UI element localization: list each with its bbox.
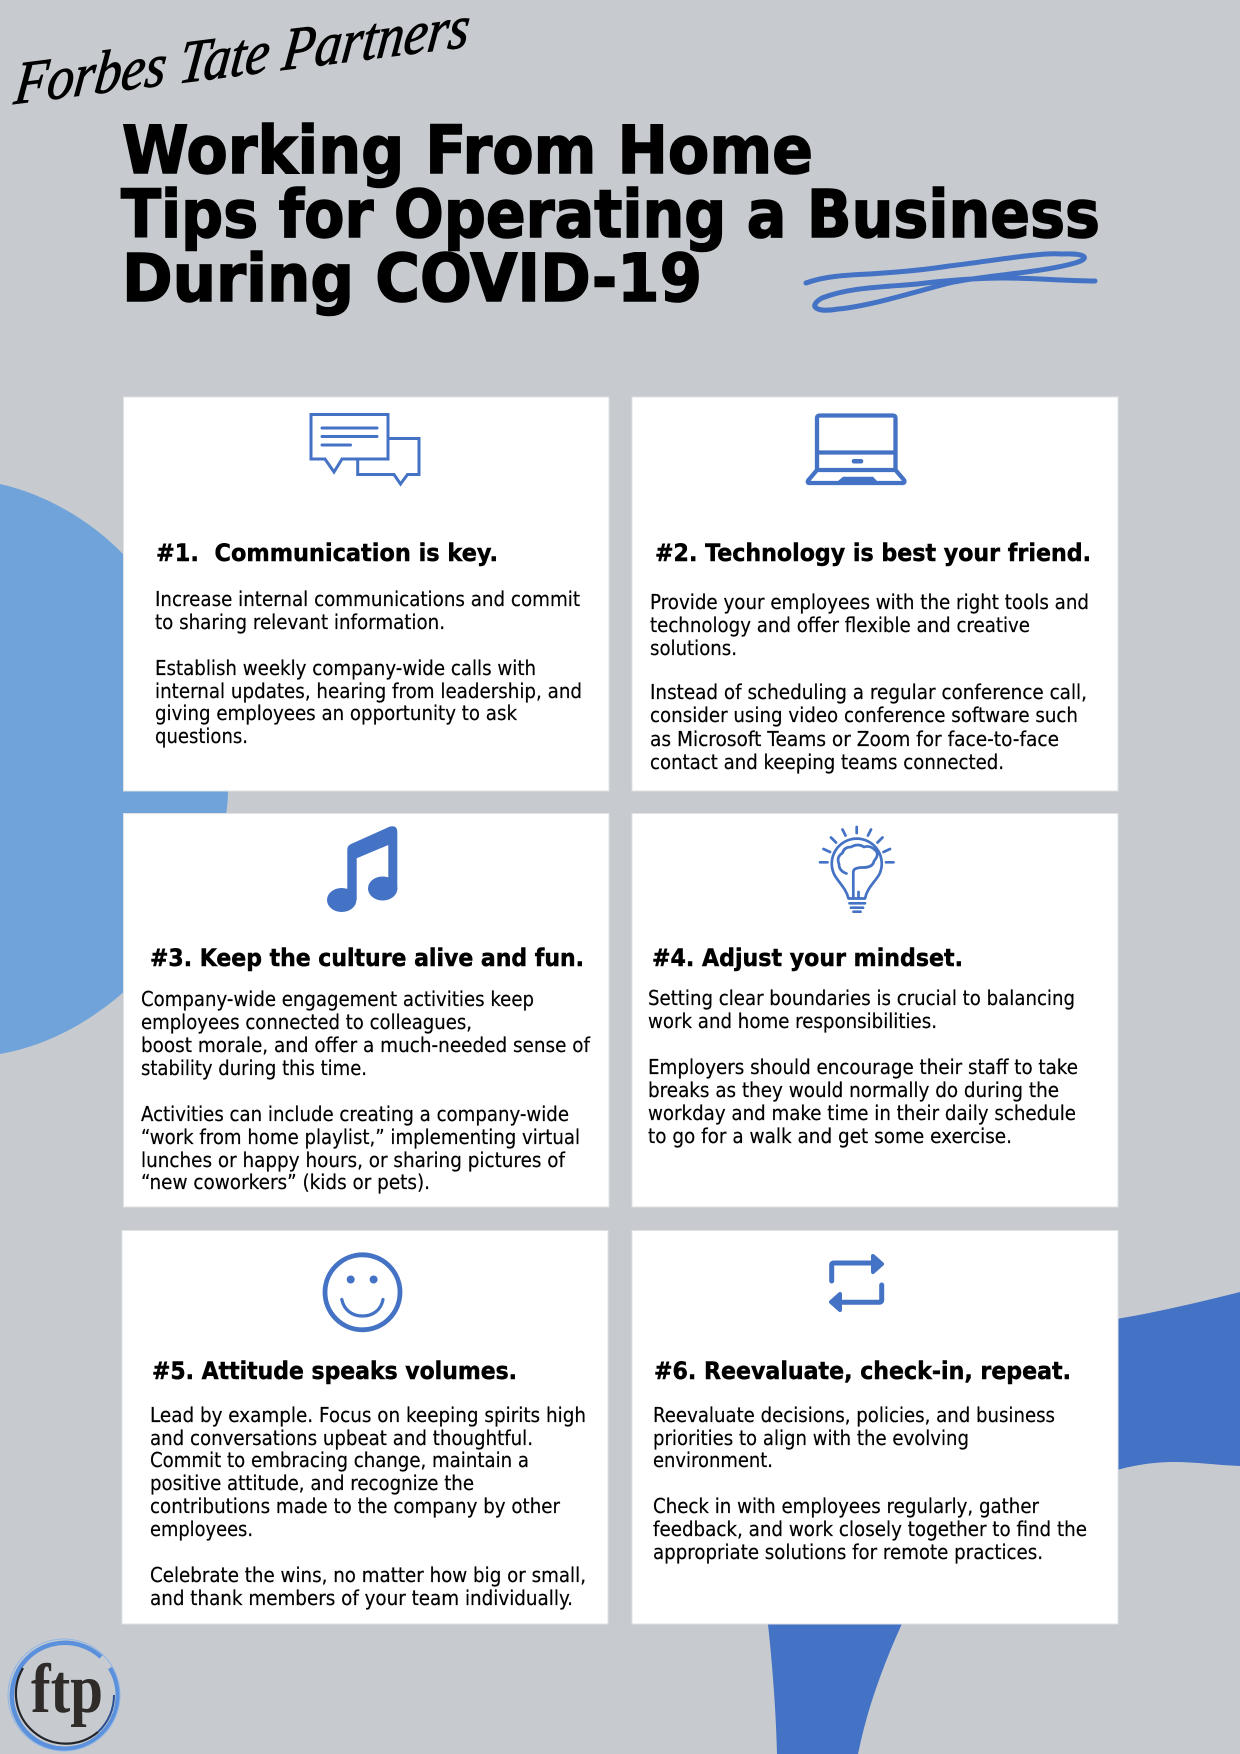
body text: tip 3: “work from home playlist,” implementing virtual <box>141 1125 580 1149</box>
panel: tip 2 technology <box>632 397 1118 791</box>
icon: laptop <box>808 416 904 483</box>
body text: tip 4: to go for a walk and get some exercise. <box>648 1124 1012 1148</box>
body text: tip 4: work and home responsibilities. <box>648 1009 937 1033</box>
body text: tip 5: Commit to embracing change, maintain a <box>150 1448 529 1472</box>
body text: tip 3: stability during this time. <box>141 1056 367 1080</box>
body text: tip 5: positive attitude, and recognize the <box>150 1471 474 1495</box>
body text: tip 2: consider using video conference software such <box>650 703 1078 727</box>
panel: tip 5 attitude <box>122 1230 608 1624</box>
panel: tip 1 communication <box>124 397 609 791</box>
body text: tip 6: feedback, and work closely together to find the <box>653 1517 1087 1541</box>
body text: tip 1: Increase internal communications and commit <box>155 587 580 611</box>
body text: tip 4: workday and make time in their daily schedule <box>648 1101 1076 1125</box>
body text: tip 4: breaks as they would normally do during the <box>648 1078 1059 1102</box>
body text: tip 2: solutions. <box>650 636 737 660</box>
icon: smiley face <box>325 1255 400 1330</box>
body text: tip 3: boost morale, and offer a much-needed sense of <box>141 1033 591 1057</box>
body text: tip 5: employees. <box>150 1517 253 1541</box>
body text: tip 5: contributions made to the company by other <box>150 1494 561 1518</box>
heading: tip 6: #6. Reevaluate, check-in, repeat. <box>654 1357 1071 1385</box>
body text: tip 6: Check in with employees regularly, gather <box>653 1494 1040 1518</box>
background blob: light blue left <box>0 484 228 1054</box>
body text: tip 5: Lead by example. Focus on keeping spirits high <box>150 1403 586 1427</box>
background blob: blue right <box>1110 1292 1240 1472</box>
decorative scribble under title <box>806 254 1095 310</box>
title: Working From Home <box>122 112 813 189</box>
icon: chat bubbles <box>311 414 419 484</box>
body text: tip 2: Instead of scheduling a regular conference call, <box>650 680 1087 704</box>
logo: ftp circle <box>8 1639 120 1751</box>
title <box>121 112 1100 317</box>
body text: tip 3: “new coworkers” (kids or pets). <box>141 1170 430 1194</box>
title: During COVID-19 <box>122 240 702 317</box>
body text: tip 6 <box>653 1403 1087 1564</box>
icon: light bulb with brain <box>820 827 894 912</box>
body text: tip 3: lunches or happy hours, or sharing pictures of <box>141 1148 566 1172</box>
body text: tip 2: as Microsoft Teams or Zoom for face-to-face <box>650 727 1059 751</box>
body text: tip 5: Celebrate the wins, no matter how big or small, <box>150 1563 586 1587</box>
body text: tip 4: Setting clear boundaries is crucial to balancing <box>648 986 1075 1010</box>
body text: tip 1: Establish weekly company-wide calls with <box>155 656 536 680</box>
logo: ftp circle: ftp <box>31 1651 103 1728</box>
icon: music note <box>327 826 397 912</box>
icon: repeat arrows <box>831 1256 882 1310</box>
background blob: blue bottom <box>767 1615 906 1754</box>
body text: tip 1 <box>155 587 582 748</box>
body text: tip 1: to sharing relevant information. <box>155 610 445 634</box>
body text: tip 3: Activities can include creating a company-wide <box>141 1102 569 1126</box>
body text: tip 6: appropriate solutions for remote practices. <box>653 1540 1043 1564</box>
body text: tip 5 <box>150 1403 586 1610</box>
body text: tip 1: giving employees an opportunity to ask <box>155 701 517 725</box>
body text: tip 5: and thank members of your team individually. <box>150 1586 573 1610</box>
body text: tip 6: priorities to align with the evolving <box>653 1426 969 1450</box>
heading: tip 5: #5. Attitude speaks volumes. <box>152 1357 517 1385</box>
body text: tip 2 <box>650 590 1089 774</box>
body text: tip 1: internal updates, hearing from leadership, and <box>155 679 582 703</box>
panel: tip 3 culture <box>124 814 609 1207</box>
body text: tip 6: environment. <box>653 1448 773 1472</box>
body text: tip 3 <box>141 987 591 1194</box>
body text: tip 2: Provide your employees with the right tools and <box>650 590 1089 614</box>
heading: tip 2: #2. Technology is best your friend. <box>655 539 1091 567</box>
body text: tip 1: questions. <box>155 724 248 748</box>
body text: tip 3: Company-wide engagement activities keep <box>141 987 534 1011</box>
heading: tip 4: #4. Adjust your mindset. <box>652 944 963 972</box>
panel: tip 6 reevaluate <box>632 1230 1118 1624</box>
body text: tip 2: technology and offer flexible and creative <box>650 613 1030 637</box>
panel: tip 4 mindset <box>632 814 1118 1207</box>
body text: tip 5: and conversations upbeat and thoughtful. <box>150 1426 533 1450</box>
body text: tip 4: Employers should encourage their staff to take <box>648 1055 1078 1079</box>
title: Tips for Operating a Business <box>121 176 1100 253</box>
body text: tip 2: contact and keeping teams connected. <box>650 750 1004 774</box>
body text: tip 3: employees connected to colleagues, <box>141 1010 472 1034</box>
body text: tip 6: Reevaluate decisions, policies, and business <box>653 1403 1055 1427</box>
heading: tip 1: #1. Communication is key. <box>156 539 498 567</box>
heading: tip 3: #3. Keep the culture alive and fun. <box>150 944 584 972</box>
body text: tip 4 <box>648 986 1078 1148</box>
